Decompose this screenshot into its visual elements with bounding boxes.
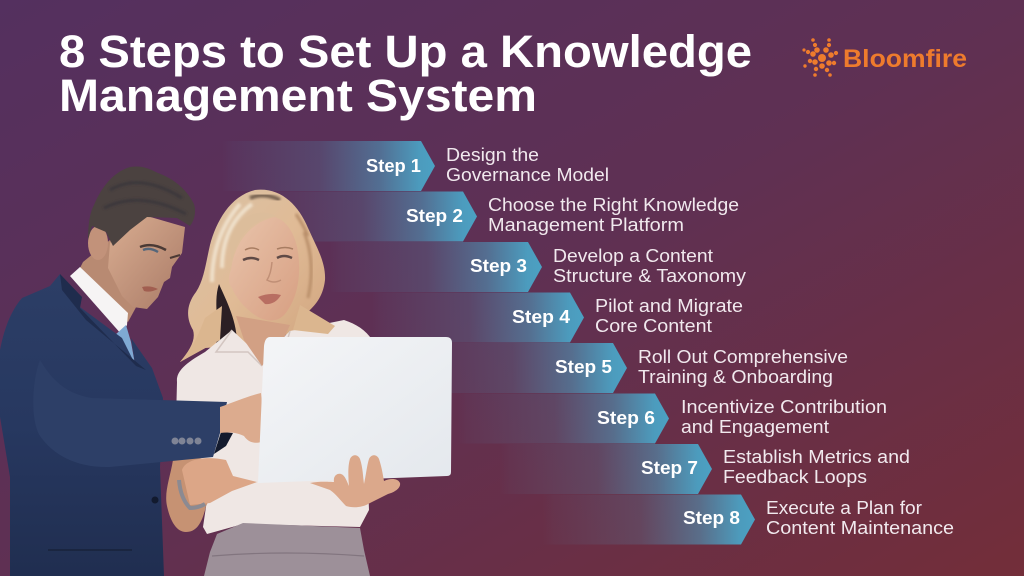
arrow banner 2 [265,192,477,242]
step 6 [457,394,887,444]
woman pointing hand [182,458,257,505]
step 6 label: Step 6 [597,408,655,428]
step 6 description: Incentivize Contribution [681,397,887,417]
man sleeve [33,360,227,467]
woman hair front and streaks [180,195,335,362]
arrow banner 3 [330,242,542,292]
arrow banner 6 [457,394,669,444]
man jacket [0,274,164,576]
illustration: woman [166,190,372,576]
woman neck [236,316,290,366]
logo wordmark: Bloomfire [843,45,967,73]
step 5 label: Step 5 [555,357,612,377]
jacket button [152,496,158,504]
step 4 label: Step 4 [512,307,570,327]
shirt cuff [214,432,233,454]
step 1 description: Design the [446,145,539,165]
step 2 description: Choose the Right Knowledge [488,195,739,215]
step 4 description: Core Content [595,316,712,336]
woman face [229,217,299,320]
man tie [115,325,135,364]
step 4 [372,292,743,342]
woman eyes and mouth [243,248,293,304]
step 7 label: Step 7 [641,458,698,478]
man hand [220,393,262,443]
man brows, eye and mouth [140,245,180,292]
logo: Bloomfire [802,38,967,77]
step 3 description: Develop a Content [553,246,713,266]
step 3 [330,242,746,292]
woman blouse [175,320,372,534]
step 7 [500,444,910,494]
woman forearm [166,458,226,532]
step 8 description: Execute a Plan for [766,498,922,518]
title [59,26,752,121]
arrow banner 7 [500,444,712,494]
man hair [88,166,195,246]
woman hair shadow [214,284,237,352]
step 3 label: Step 3 [470,256,527,276]
woman fingers over laptop [310,455,400,507]
jacket pocket [48,549,132,551]
step 7 description: Establish Metrics and [723,447,910,467]
arrow banner 1 [222,141,435,191]
watch [179,480,205,508]
sleeve buttons [172,438,202,444]
man shirt collar [70,267,128,335]
step 2 [265,192,739,242]
blouse collar [216,330,306,366]
step 8 label: Step 8 [683,508,740,528]
step 2 label: Step 2 [406,206,463,226]
man ear [88,226,108,260]
arrow banner 8 [543,494,755,544]
step 2 description: Management Platform [488,215,684,235]
woman hair back [180,190,325,362]
step 8 [543,494,954,544]
step 1 description: Governance Model [446,165,609,185]
lapel [60,274,146,370]
man face [108,216,185,309]
step 6 description: and Engagement [681,417,829,437]
step 5 [415,343,848,393]
laptop [258,337,452,483]
title: Management System [59,70,537,121]
arrow banner 5 [415,343,627,393]
skirt waistband line [212,553,364,556]
step 5 description: Training & Onboarding [638,367,833,387]
step 8 description: Content Maintenance [766,518,954,538]
step 1 [222,141,609,191]
man hair highlights [104,183,186,214]
icon: bloom dots [802,38,838,77]
arrow banner 4 [372,292,584,342]
step 3 description: Structure & Taxonomy [553,266,746,286]
man neck [78,240,140,322]
step 7 description: Feedback Loops [723,467,867,487]
step 5 description: Roll Out Comprehensive [638,347,848,367]
step 1 label: Step 1 [366,156,421,176]
title: 8 Steps to Set Up a Knowledge [59,26,752,77]
woman skirt [204,523,370,576]
step 4 description: Pilot and Migrate [595,296,743,316]
illustration: man [0,166,262,576]
